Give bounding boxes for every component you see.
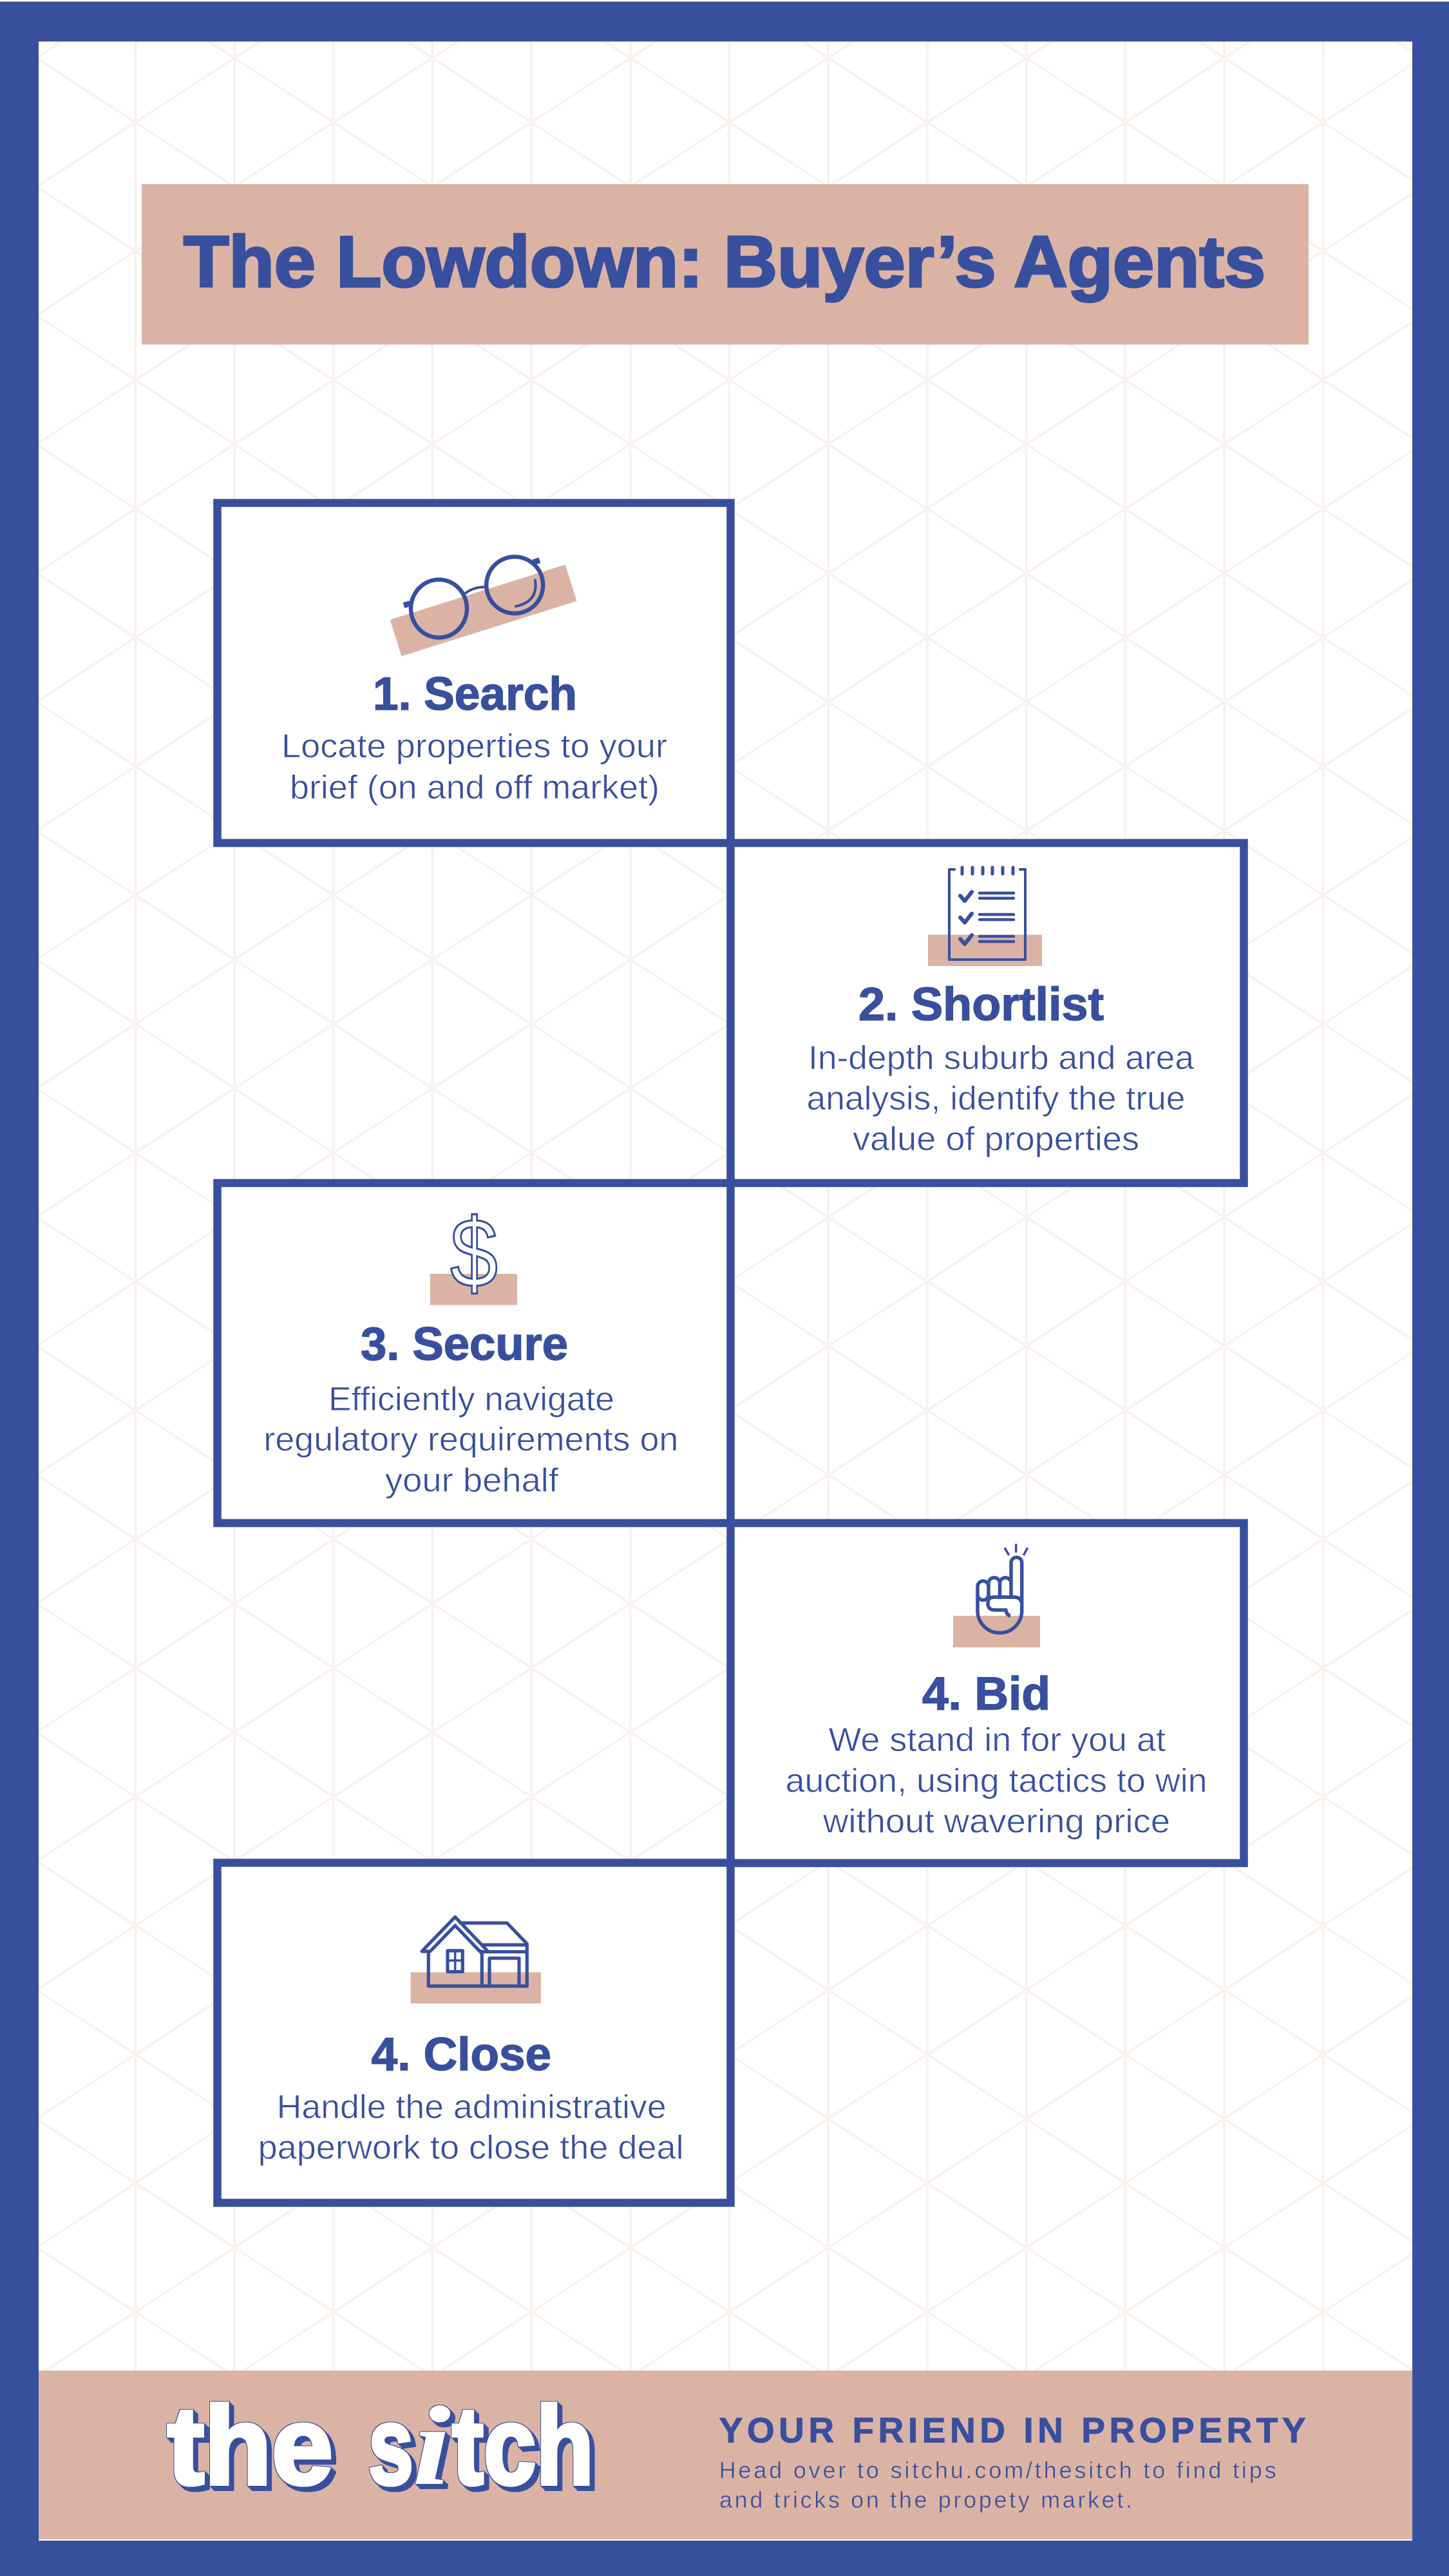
footer heading: YOUR FRIEND IN PROPERTY <box>719 2410 1306 2450</box>
body text: search <box>281 728 667 806</box>
body text: close <box>258 2088 684 2166</box>
footer text: Head over to sitchu.com/thesitch to find tips <box>719 2457 1276 2483</box>
icon: house <box>411 1917 541 2003</box>
body text: shortlist <box>806 1039 1194 1158</box>
heading: 4. Bid: 4. Bid <box>922 1669 1050 1720</box>
body text: shortlist: analysis, identify the true <box>806 1080 1185 1117</box>
body text: search: Locate properties to your <box>281 728 667 765</box>
body text: close: Handle the administrative <box>277 2088 667 2126</box>
logo: the sitch <box>167 2383 594 2509</box>
body text: search: brief (on and off market) <box>290 769 659 806</box>
body text: bid <box>786 1721 1208 1841</box>
title banner <box>142 184 1309 345</box>
icon: glasses <box>390 556 577 656</box>
footer banner <box>39 2371 1412 2539</box>
body text: secure: your behalf <box>385 1462 559 1499</box>
logo: the sitch: s <box>368 2384 413 2508</box>
logo: the sitch: i <box>412 2383 451 2509</box>
heading: 2. Shortlist: 2. Shortlist <box>858 979 1104 1030</box>
icon: dollar sign <box>430 1198 517 1308</box>
body text: secure <box>263 1381 678 1499</box>
body text: close: paperwork to close the deal <box>258 2129 684 2166</box>
icon: checklist <box>928 867 1042 966</box>
panel: step 3 secure <box>218 1183 730 1523</box>
title: The Lowdown: Buyer’s Agents <box>184 222 1265 302</box>
body text: secure: regulatory requirements on <box>263 1421 678 1459</box>
body text: bid: We stand in for you at <box>828 1721 1166 1759</box>
icon: raised finger <box>953 1544 1040 1647</box>
logo: the sitch: tch <box>452 2384 594 2508</box>
footer text: and tricks on the propety market. <box>719 2486 1132 2513</box>
body text: shortlist: value of properties <box>853 1121 1139 1158</box>
body text: secure: Efficiently navigate <box>328 1381 614 1418</box>
logo: the sitch: the <box>167 2384 333 2508</box>
panel: step 1 search <box>218 503 730 843</box>
body text: bid: auction, using tactics to win <box>786 1763 1208 1800</box>
panel: step 4 bid <box>730 1523 1244 1863</box>
body text: bid: without wavering price <box>822 1803 1170 1841</box>
icon: dollar sign: $ <box>450 1198 498 1308</box>
heading: 1. Search: 1. Search <box>373 668 577 720</box>
heading: 3. Secure: 3. Secure <box>361 1319 568 1370</box>
body text: shortlist: In-depth suburb and area <box>808 1039 1194 1077</box>
panel: step 5 close <box>218 1862 730 2202</box>
footer text <box>719 2457 1276 2513</box>
heading: 4. Close: 4. Close <box>372 2029 551 2080</box>
panel: step 2 shortlist <box>730 843 1244 1183</box>
